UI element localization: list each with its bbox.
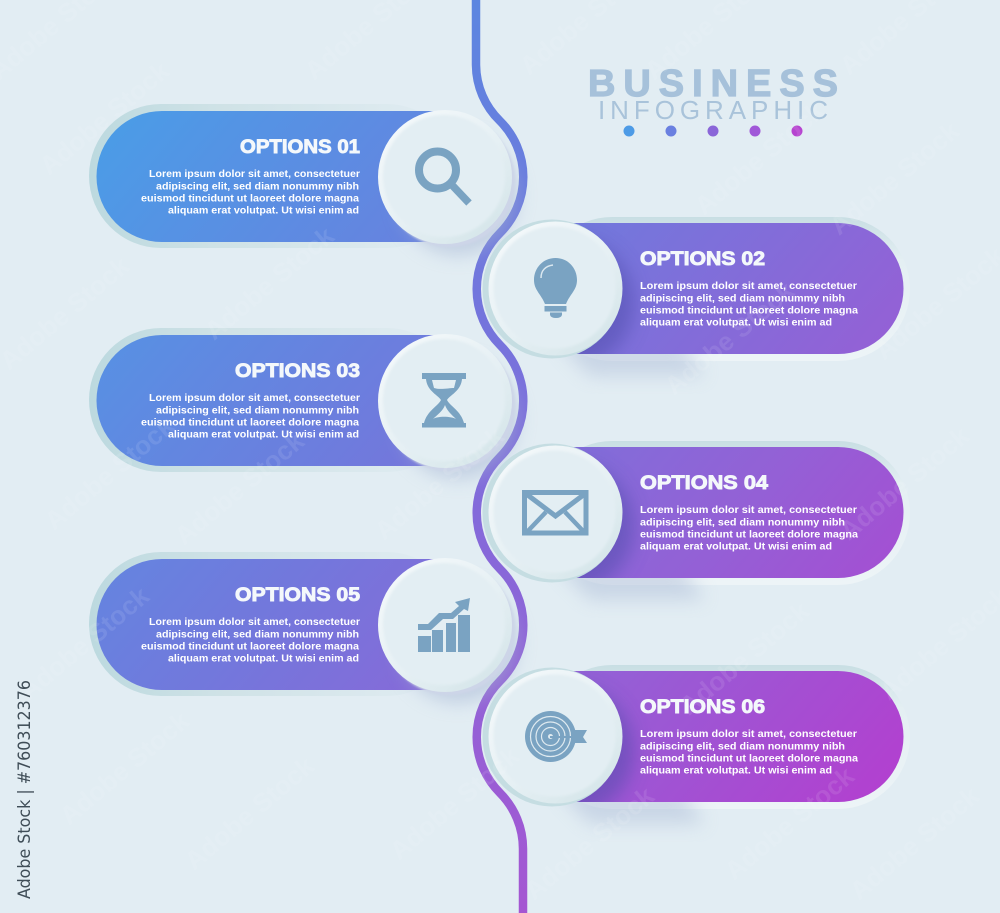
text block 05: adipiscing elit, sed diam nonummy nibh xyxy=(156,628,359,640)
text block 04: Lorem ipsum dolor sit amet, consectetuer xyxy=(640,504,857,516)
text block 04: aliquam erat volutpat. Ut wisi enim ad xyxy=(640,540,832,552)
text block 05: Lorem ipsum dolor sit amet, consectetuer xyxy=(149,616,360,628)
circle shadow on pill 06 xyxy=(577,686,641,802)
panel: options 03 xyxy=(89,328,518,479)
watermark pattern: Adobe Stock xyxy=(834,420,975,546)
circle 01 xyxy=(378,110,518,255)
text block 04: euismod tincidunt ut laoreet dolore magna xyxy=(640,528,858,540)
watermark pattern: Adobe Stock xyxy=(719,760,860,886)
text block 03 xyxy=(141,392,360,440)
text block 06: aliquam erat volutpat. Ut wisi enim ad xyxy=(640,764,832,776)
panel: options 01 xyxy=(89,104,518,255)
text block 03: euismod tincidunt ut laoreet dolore magna xyxy=(141,416,359,428)
heading: BUSINESS: BUSINESS xyxy=(588,63,838,105)
circle 05 xyxy=(378,558,518,703)
watermark pattern: Adobe Stock xyxy=(179,750,320,876)
text block 02: Lorem ipsum dolor sit amet, consectetuer xyxy=(640,280,857,292)
text block 03: adipiscing elit, sed diam nonummy nibh xyxy=(156,404,359,416)
icon: magnifier xyxy=(419,152,469,203)
text block 04: adipiscing elit, sed diam nonummy nibh xyxy=(640,516,845,528)
watermark pattern: Adobe Stock xyxy=(519,780,660,906)
pill 05 xyxy=(96,559,440,690)
icon: target xyxy=(525,711,587,762)
text block 03: aliquam erat volutpat. Ut wisi enim ad xyxy=(168,428,359,440)
pill shadow 04 xyxy=(555,564,705,600)
heading 06: OPTIONS 06 xyxy=(640,696,765,718)
heading 02: OPTIONS 02 xyxy=(640,248,765,270)
watermark pattern: Adobe Stock xyxy=(824,115,965,241)
text block 03: Lorem ipsum dolor sit amet, consectetuer xyxy=(149,392,360,404)
circle shadow on pill 04 xyxy=(577,466,639,578)
pill 02 xyxy=(560,223,904,354)
text block 05: euismod tincidunt ut laoreet dolore magna xyxy=(141,640,359,652)
watermark pattern: Adobe Stock xyxy=(369,420,510,546)
text block 02: adipiscing elit, sed diam nonummy nibh xyxy=(640,292,845,304)
heading 03: OPTIONS 03 xyxy=(235,360,360,382)
pill rim 01 xyxy=(89,104,459,248)
panel: options 04 xyxy=(482,441,910,600)
text block 02: aliquam erat volutpat. Ut wisi enim ad xyxy=(640,316,832,328)
heading 01: OPTIONS 01 xyxy=(240,136,360,158)
text block 04 xyxy=(640,504,858,552)
panel: options 02 xyxy=(482,217,910,376)
text block 01: euismod tincidunt ut laoreet dolore magna xyxy=(141,192,359,204)
watermark pattern: Adobe Stock xyxy=(39,410,180,536)
heading 04: OPTIONS 04 xyxy=(640,472,768,494)
icon: light bulb xyxy=(534,258,577,318)
watermark pattern: Adobe Stock xyxy=(14,580,155,706)
watermark pattern: Adobe Stock xyxy=(844,780,985,906)
text block 01 xyxy=(141,168,360,216)
icon: hourglass xyxy=(422,373,466,428)
watermark pattern: Adobe Stock xyxy=(169,425,310,551)
text block 02: euismod tincidunt ut laoreet dolore magna xyxy=(640,304,858,316)
circle shadow on pill 02 xyxy=(577,246,638,354)
watermark pattern: Adobe Stock xyxy=(659,275,800,401)
icon: envelope xyxy=(524,492,586,533)
panel: options 06 xyxy=(482,665,910,824)
watermark pattern: Adobe Stock xyxy=(674,595,815,721)
watermark pattern: Adobe Stock xyxy=(54,705,195,831)
watermark pattern: Adobe Stock xyxy=(689,95,830,221)
pill 04 xyxy=(560,447,904,578)
text block 06: adipiscing elit, sed diam nonummy nibh xyxy=(640,740,845,752)
connector line xyxy=(476,0,523,913)
decorative dots xyxy=(624,126,802,136)
pill rim 04 xyxy=(540,441,910,585)
pill shadow 06 xyxy=(555,788,705,824)
watermark pattern: Adobe Stock xyxy=(34,55,175,181)
pill rim 05 xyxy=(89,552,459,696)
text block 05: aliquam erat volutpat. Ut wisi enim ad xyxy=(168,652,359,664)
circle 02 xyxy=(482,220,622,358)
text block 02 xyxy=(640,280,858,328)
text block 01: Lorem ipsum dolor sit amet, consectetuer xyxy=(149,168,360,180)
panel: options 05 xyxy=(89,552,518,703)
pill rim 06 xyxy=(540,665,910,809)
subheading: INFOGRAPHIC: INFOGRAPHIC xyxy=(598,95,828,125)
text block 06: euismod tincidunt ut laoreet dolore magna xyxy=(640,752,858,764)
pill 06 xyxy=(560,671,904,802)
heading 05: OPTIONS 05 xyxy=(235,584,360,606)
pill 01 xyxy=(96,111,440,242)
circle 03 xyxy=(378,334,518,479)
icon: growth chart xyxy=(418,598,470,652)
circle 04 xyxy=(482,444,622,582)
text block 05 xyxy=(141,616,360,664)
text block 01: adipiscing elit, sed diam nonummy nibh xyxy=(156,180,359,192)
title xyxy=(588,63,838,136)
watermark pattern: Adobe Stock xyxy=(384,740,525,866)
text block 01: aliquam erat volutpat. Ut wisi enim ad xyxy=(168,204,359,216)
watermark credit: Adobe Stock | #760312376 xyxy=(15,680,35,899)
text block 06 xyxy=(640,728,858,776)
pill 03 xyxy=(96,335,440,466)
pill rim 03 xyxy=(89,328,459,472)
circle 06 xyxy=(482,668,622,806)
watermark pattern: Adobe Stock xyxy=(199,220,340,346)
text block 06: Lorem ipsum dolor sit amet, consectetuer xyxy=(640,728,857,740)
pill rim 02 xyxy=(540,217,910,361)
pill shadow 02 xyxy=(555,340,705,376)
